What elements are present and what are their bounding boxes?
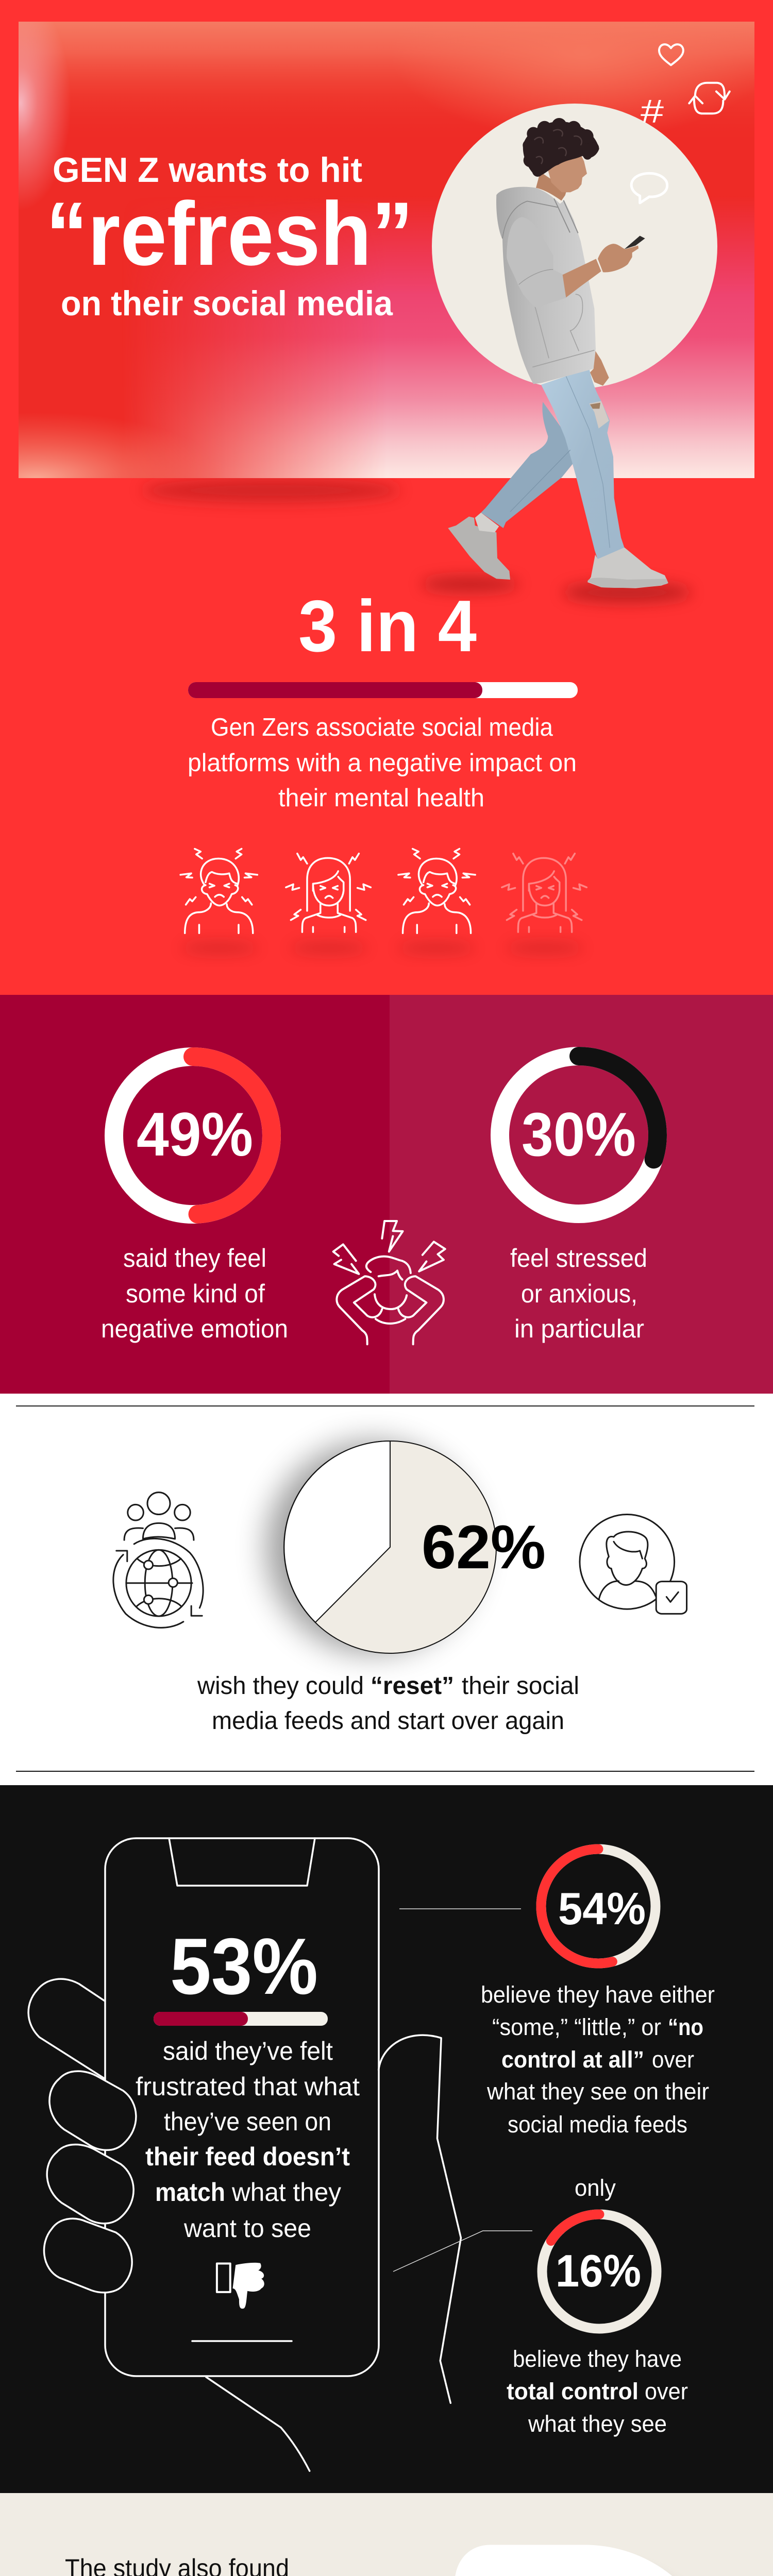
phone xyxy=(625,236,645,249)
fingers xyxy=(28,1979,461,2471)
progress bar: 53 percent xyxy=(154,2012,328,2026)
icon: repost arrows xyxy=(689,83,730,113)
panel: cream positive section xyxy=(0,2493,773,2576)
text: believe they have total control: what they see xyxy=(528,2411,667,2437)
text: feel stressed: in particular xyxy=(514,1314,644,1343)
text: feel stressed xyxy=(510,1244,647,1343)
icon row: stressed people xyxy=(180,849,586,954)
icon: person with check badge xyxy=(580,1515,687,1614)
donut: 16 percent xyxy=(542,2214,657,2329)
text: said they feel xyxy=(101,1244,288,1343)
text: believe they have total control: believe they have xyxy=(513,2346,682,2372)
lower hand line xyxy=(206,2377,310,2471)
far hand xyxy=(590,349,609,386)
text: said they have felt frustrated: what they xyxy=(231,2178,341,2207)
pie chart: 62 percent: 62% xyxy=(422,1513,546,1582)
text: said they feel: some kind of xyxy=(126,1279,265,1308)
text: believe they have either: over xyxy=(652,2046,694,2073)
donut: 30 percent xyxy=(500,1056,658,1214)
connector lines xyxy=(393,1909,532,2272)
right palm line xyxy=(379,2035,461,2403)
text: believe they have either xyxy=(481,1981,715,2138)
text: said they have felt frustrated: said they’ve felt xyxy=(163,2037,333,2065)
panel: hero gradient card xyxy=(0,0,773,546)
text: Gen Zers associate: their mental health xyxy=(278,784,484,812)
white blob with smiling woman xyxy=(455,2545,733,2576)
icon: chat bubble xyxy=(631,173,667,203)
text: believe they have total control: total control xyxy=(507,2378,638,2404)
title: GEN Z wants to hit refresh: GEN Z wants to hit xyxy=(53,150,362,190)
home bar xyxy=(192,2340,292,2342)
text: wish they could reset: media feeds and start over again xyxy=(212,1707,564,1735)
text: wish they could reset: their social xyxy=(462,1672,579,1700)
text: said they have felt frustrated: want to see xyxy=(183,2214,311,2243)
neck xyxy=(536,172,567,200)
text: feel stressed: or anxious, xyxy=(521,1279,637,1308)
text: believe they have either: social media feeds xyxy=(508,2111,687,2138)
panel: black feed section xyxy=(0,1785,773,2493)
text: said they have felt frustrated: they’ve seen on xyxy=(164,2107,331,2136)
icon: stressed woman 2, faded xyxy=(502,854,586,932)
text: wish they could reset: wish they could xyxy=(197,1672,364,1700)
text: only: only xyxy=(575,2175,616,2201)
text: believe they have total control: over xyxy=(645,2378,688,2404)
panel: 30 percent right xyxy=(390,995,773,1394)
text: 53 percent: 53% xyxy=(170,1922,318,2011)
headline stat: 3 in 4: 3 in 4 xyxy=(298,585,477,667)
text: believe they have either: believe they have either xyxy=(481,1981,715,2008)
text: said they feel: said they feel xyxy=(123,1244,266,1273)
hair xyxy=(523,118,599,177)
icon: thumbs down xyxy=(217,2263,264,2309)
icon: stressed man 1 xyxy=(180,849,257,933)
text: believe they have either: what they see on their xyxy=(486,2078,709,2105)
icon: heart xyxy=(659,44,683,65)
legs and shoes xyxy=(448,368,668,588)
title: GEN Z wants to hit refresh: “refresh” xyxy=(46,184,413,284)
text: Gen Zers associate xyxy=(188,714,577,812)
photo: young man walking with phone xyxy=(448,118,668,588)
panel: red header background xyxy=(0,0,773,995)
icon: stressed man 2 xyxy=(398,849,475,933)
donut: 54 percent xyxy=(541,1849,656,1963)
text: Gen Zers associate: Gen Zers associate social media xyxy=(211,714,553,741)
hero cream circle xyxy=(432,104,717,389)
progress bar: 3 in 4 xyxy=(188,682,578,698)
text: said they have felt frustrated: their feed doesn’t xyxy=(145,2142,350,2171)
icon: stressed person holding head xyxy=(333,1221,445,1344)
text: wish they could reset: “reset” xyxy=(371,1672,454,1700)
text: said they feel: negative emotion xyxy=(101,1314,288,1343)
donut: 49 percent: 49% xyxy=(137,1100,253,1169)
title: GEN Z wants to hit refresh: on their social media xyxy=(61,284,393,323)
text: said they have felt frustrated xyxy=(136,2037,360,2243)
face xyxy=(548,154,587,192)
text: believe they have either: control at all” xyxy=(501,2046,644,2073)
forearm xyxy=(563,259,601,297)
shoe shadows xyxy=(421,577,692,603)
sleeve xyxy=(507,217,566,308)
donut: 16 percent: 16% xyxy=(556,2245,641,2296)
torso, head and arm xyxy=(496,118,645,386)
panel: white reset section xyxy=(0,1394,773,1785)
text: feel stressed: feel stressed xyxy=(510,1244,647,1273)
text: believe they have total control xyxy=(507,2346,688,2437)
hand xyxy=(598,244,638,273)
donut: 49 percent xyxy=(114,1057,272,1214)
title: GEN Z wants to hit refresh xyxy=(46,150,413,323)
hoodie xyxy=(496,187,596,384)
icon: globe with people and refresh arrows xyxy=(113,1493,203,1628)
icon: stressed woman 1 xyxy=(286,854,371,932)
phone outline xyxy=(105,1838,379,2376)
panel: 49 percent left xyxy=(0,995,390,1394)
text: believe they have either: “no xyxy=(668,2014,703,2040)
text: believe they have either: “some,” “little,” or xyxy=(492,2014,661,2040)
donut: 30 percent: 30% xyxy=(522,1100,636,1169)
donut: 54 percent: 54% xyxy=(558,1883,646,1934)
phone notch xyxy=(169,1838,315,1886)
text: wish they could reset xyxy=(197,1672,579,1735)
text: said they have felt frustrated: frustrated that what xyxy=(136,2072,360,2101)
icon: hashtag: # xyxy=(641,93,664,130)
text: Gen Zers associate: platforms with a negative impact on xyxy=(188,749,577,777)
text: said they have felt frustrated: match xyxy=(155,2178,225,2207)
pie chart: 62 percent xyxy=(266,1441,546,1653)
illustration: hand holding phone xyxy=(28,1838,461,2471)
